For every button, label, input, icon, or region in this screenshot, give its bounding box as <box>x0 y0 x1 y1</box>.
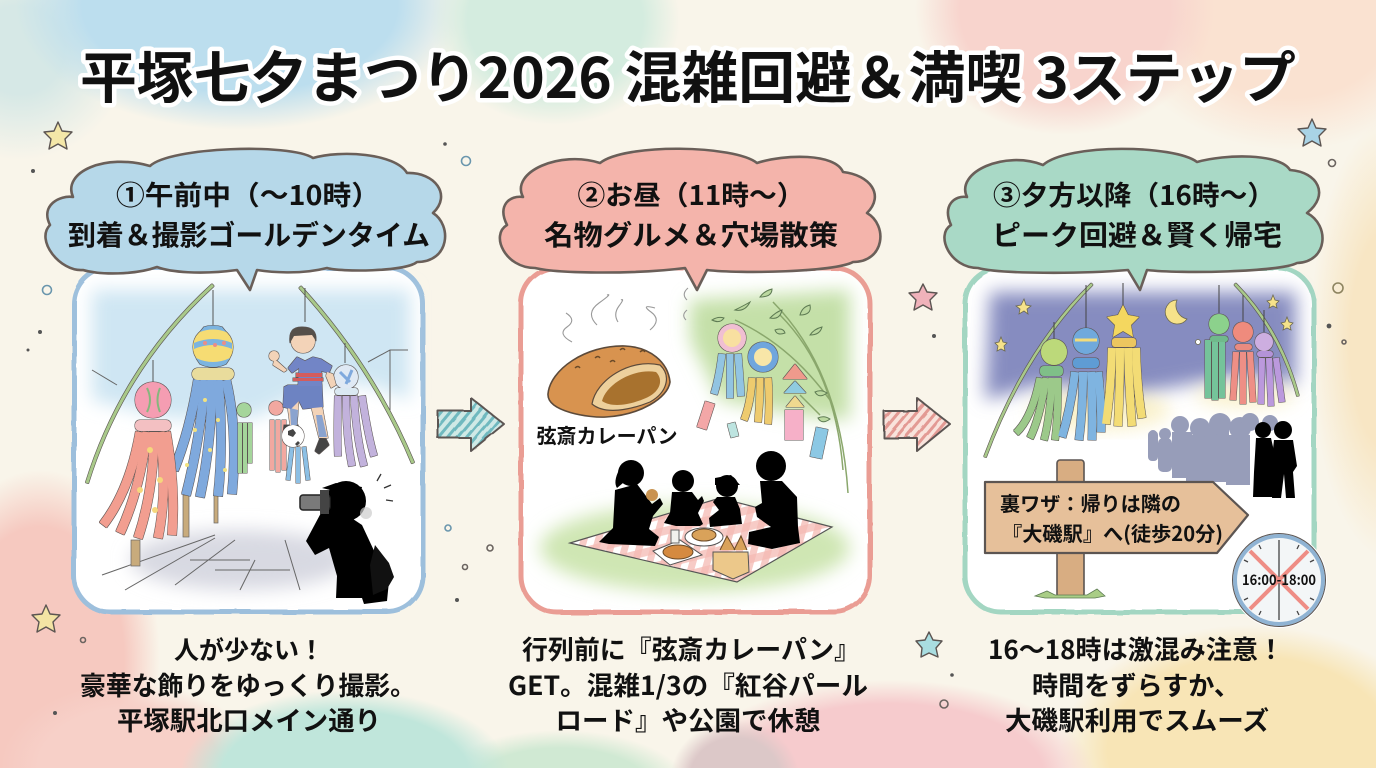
sign text: 裏ワザ：帰りは隣の <box>1000 488 1181 517</box>
photographer silhouette <box>300 474 394 604</box>
curry bread <box>548 346 670 417</box>
moon and stars <box>995 295 1293 351</box>
kazari: evening set <box>1016 305 1282 440</box>
caption 1: 豪華な飾りをゆっくり撮影。 <box>80 666 416 703</box>
arrow 2 <box>884 398 950 451</box>
illustration: curry bread and picnic <box>536 288 850 592</box>
icon: blue star top right <box>1298 119 1326 146</box>
icon: pink star <box>909 284 937 310</box>
illustration: evening sky and kazari <box>985 283 1327 628</box>
title: 平塚七夕まつり2026 混雑回避＆満喫 3ステップ <box>80 34 1296 115</box>
speech bubble 2: 名物グルメ＆穴場散策 <box>544 214 838 254</box>
panel: step 2 noon <box>500 149 880 738</box>
panel frame <box>965 268 1314 612</box>
caption 2: 行列前に『弦斎カレーパン』 <box>522 630 860 667</box>
speech bubble 1: 到着＆撮影ゴールデンタイム <box>68 214 430 254</box>
couple silhouettes <box>1253 421 1297 498</box>
steam <box>563 288 688 342</box>
bamboo poles <box>87 285 413 483</box>
caption 2: ロード』や公園で休憩 <box>556 701 820 738</box>
decorative stars <box>32 119 1326 657</box>
bamboo poles <box>985 284 1298 457</box>
icon: teal star bottom <box>916 632 942 657</box>
bubble heading: ③夕方以降（16時～） <box>993 174 1275 213</box>
soccer player <box>269 327 336 454</box>
signpost <box>985 460 1248 598</box>
kazari: pink <box>103 382 173 566</box>
panel: step 1 morning <box>45 149 445 738</box>
decorative dots <box>26 142 1346 715</box>
kazari: blue <box>174 326 234 537</box>
caption 2: GET。混雑1/3の『紅谷パール <box>508 666 868 703</box>
bamboo with ornaments <box>697 289 848 493</box>
panel: step 3 evening <box>944 149 1327 738</box>
icon: clock with cross <box>1231 532 1327 628</box>
bubble heading: ①午前中（～10時） <box>116 174 380 213</box>
arrow 1 <box>438 398 504 451</box>
icon: clock with cross: 16:00-18:00 <box>1242 570 1316 590</box>
caption 3: 16～18時は激混み注意！ <box>988 630 1284 667</box>
label: curry bread: 弦斎カレーパン <box>536 420 678 449</box>
icon: yellow star bottom left <box>32 605 60 632</box>
caption 3: 大磯駅利用でスムーズ <box>1005 701 1269 738</box>
crowd silhouettes <box>1148 413 1278 485</box>
caption 1 <box>80 631 416 738</box>
bubble heading: ②お昼（11時～） <box>578 174 804 213</box>
blanket and food <box>570 498 832 582</box>
speech bubble 3 <box>944 149 1323 290</box>
caption 2 <box>508 630 868 738</box>
speech bubble 3: ピーク回避＆賢く帰宅 <box>992 214 1282 254</box>
speech bubble 2 <box>500 149 880 290</box>
panel frame <box>74 268 423 612</box>
caption 3: 時間をずらすか、 <box>1032 666 1240 703</box>
signpost: 『大磯駅』へ(徒歩20分) <box>1002 518 1223 547</box>
caption 3 <box>988 630 1284 738</box>
family silhouettes <box>599 451 800 549</box>
caption 1: 人が少ない！ <box>174 631 324 667</box>
icon: yellow star top left <box>44 122 72 149</box>
panel frame <box>521 268 870 612</box>
illustration: morning street with kazari <box>87 285 413 604</box>
caption 1: 平塚駅北口メイン通り <box>117 701 381 738</box>
kazari: small distant <box>237 401 308 483</box>
kazari: purple <box>334 365 374 466</box>
speech bubble 1 <box>45 149 445 290</box>
